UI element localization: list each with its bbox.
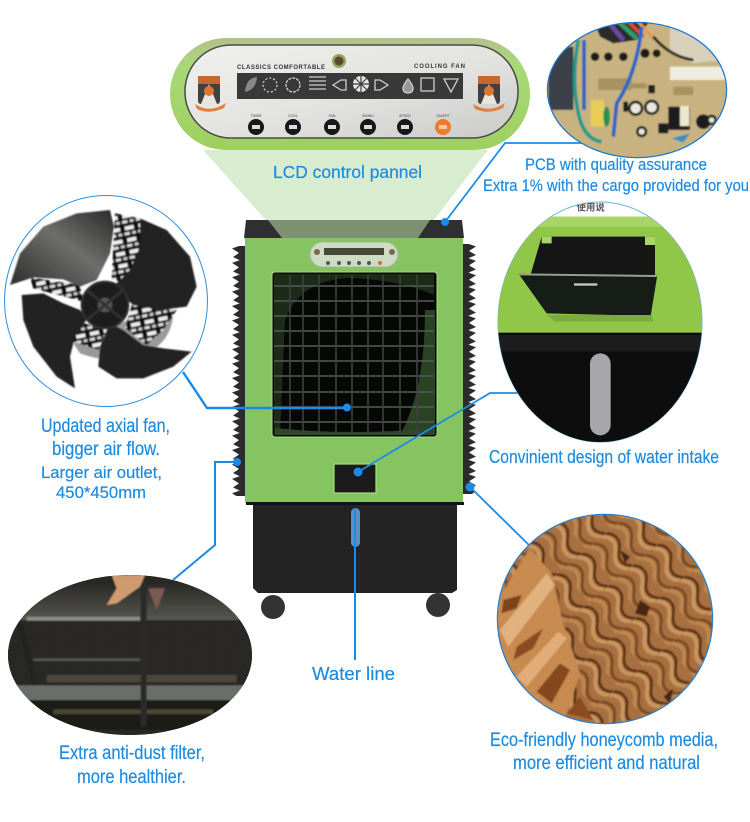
caption: water line: Water line xyxy=(312,664,395,684)
panel: honeycomb media photo xyxy=(493,512,717,726)
panel outer shell xyxy=(170,38,530,150)
control buttons xyxy=(248,114,451,135)
caption: axial fan xyxy=(41,416,170,502)
green body xyxy=(245,238,463,503)
line: PCB xyxy=(441,143,583,226)
control buttons: SWING xyxy=(362,114,374,118)
mesh gaps xyxy=(30,213,177,350)
top cap xyxy=(244,220,464,238)
caption: dust filter: Extra anti-dust filter, xyxy=(59,743,205,764)
panel: water intake photo xyxy=(493,202,707,446)
caption: honeycomb: Eco-friendly honeycomb media, xyxy=(490,730,718,751)
caption: axial fan: Updated axial fan, xyxy=(41,416,170,437)
caption: axial fan: 450*450mm xyxy=(56,483,146,502)
caption: PCB xyxy=(483,156,749,195)
control buttons: FAN xyxy=(329,114,336,118)
line: water level xyxy=(354,508,356,660)
caption: water intake: Convinient design of water intake xyxy=(489,447,719,467)
left badge xyxy=(195,76,226,112)
fan guard ring xyxy=(73,303,173,360)
line: dust filter xyxy=(173,458,241,580)
lower ledge xyxy=(246,502,464,505)
caption: PCB: PCB with quality assurance xyxy=(525,156,707,174)
panel header left: CLASSICS COMFORTABLE xyxy=(237,65,325,71)
mini control panel xyxy=(310,242,398,267)
panel: PCB photo xyxy=(547,20,733,160)
indicator light xyxy=(332,54,346,68)
line: axial fan xyxy=(183,372,351,412)
caption: honeycomb xyxy=(490,730,718,774)
caption: dust filter: more healthier. xyxy=(77,767,186,788)
control buttons: SPEED xyxy=(399,114,411,118)
side fins xyxy=(231,244,477,496)
caption: honeycomb: more efficient and natural xyxy=(513,753,700,774)
wheels xyxy=(261,593,450,619)
water level window xyxy=(351,508,360,547)
panel: LCD control panel close-up xyxy=(170,38,530,150)
control buttons: COOL xyxy=(288,114,298,118)
line: honeycomb xyxy=(466,482,532,548)
panel: dust filter photo xyxy=(7,573,257,737)
hub xyxy=(82,282,128,328)
fan grill xyxy=(272,272,437,437)
caption: dust filter xyxy=(59,743,205,788)
leader lines xyxy=(173,143,583,660)
LCD display xyxy=(237,73,463,99)
panel header right: COOLING FAN xyxy=(414,64,465,70)
caption: axial fan: bigger air flow. xyxy=(52,439,160,460)
line: water intake xyxy=(354,393,522,476)
air cooler unit xyxy=(231,220,477,619)
panel silver face xyxy=(185,45,518,138)
water intake door xyxy=(334,464,376,493)
right badge xyxy=(473,76,505,112)
panel: water intake photo: 使用说 xyxy=(577,202,605,213)
blades xyxy=(10,210,114,287)
panel: axial fan photo xyxy=(4,196,208,406)
light beam from control panel to unit xyxy=(203,150,488,238)
water tank base xyxy=(253,503,457,593)
control buttons: ON/OFF xyxy=(436,114,450,118)
control buttons: TIMER xyxy=(251,114,262,118)
heading: LCD control pannel: LCD control pannel xyxy=(273,162,422,182)
caption: axial fan: Larger air outlet, xyxy=(41,463,162,482)
